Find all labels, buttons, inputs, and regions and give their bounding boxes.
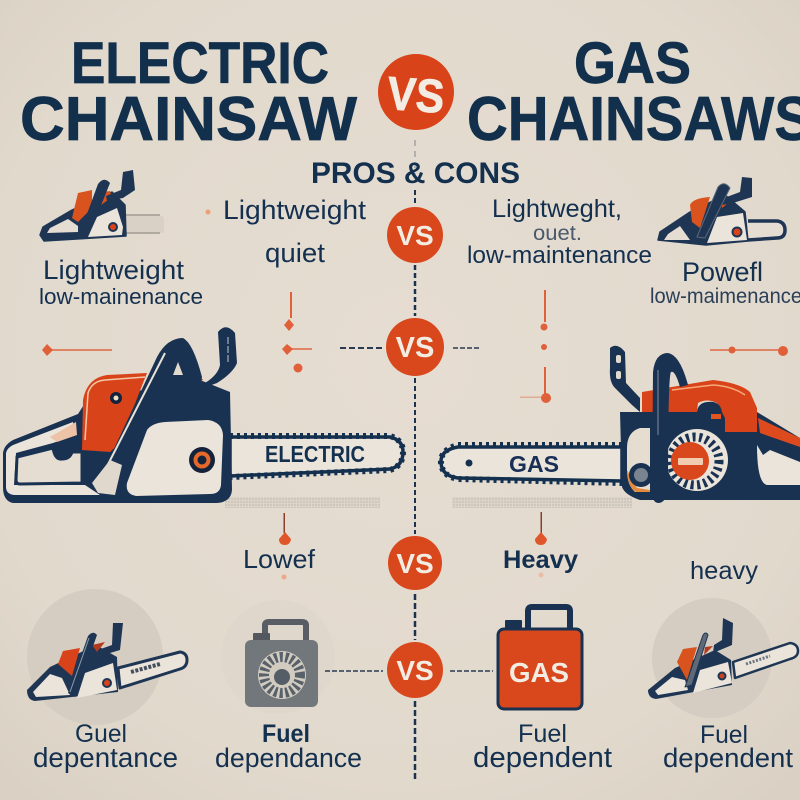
chain: [230, 436, 403, 477]
icon: vs badge row three: VS: [396, 548, 434, 579]
icon: vs badge row two: VS: [396, 332, 434, 364]
front a-handle: [97, 338, 202, 495]
text: powerful low-maintenance right: [650, 257, 800, 308]
shadow under gas saw: [452, 497, 632, 508]
text: lightweight low-maintenance left: Lightweight: [43, 255, 184, 285]
guide bar: [230, 437, 403, 476]
handle peach highlight: [50, 422, 77, 442]
rear handle: [6, 422, 100, 495]
callout: lower label right: [503, 512, 578, 578]
callout: lower label left: Lowef: [243, 544, 316, 574]
text: lightweight quiet: Lightweight: [223, 195, 367, 225]
title: vs badge: VS: [386, 66, 446, 123]
text: lightweight quiet: quiet: [265, 238, 325, 268]
cover eyelet: [110, 392, 122, 404]
icon: vs badge row one: [387, 207, 443, 263]
text: fuel dependance: Fuel: [262, 720, 310, 748]
callout: lower label right: Heavy: [503, 546, 578, 574]
illustration: large electric chainsaw: [3, 327, 403, 508]
icon: chainsaw in circle bottom right: [648, 598, 798, 718]
text: fuel dependent far right: dependent: [663, 743, 793, 773]
bar label: GAS: [509, 451, 559, 477]
icon: vs badge row two: [386, 318, 444, 376]
rear handle: [758, 418, 800, 447]
text: lightweight quiet low-maintenance: [467, 195, 652, 269]
icon: gray fuel can: [221, 600, 335, 714]
guide bar and chain: [441, 447, 622, 481]
icon: chainsaw in circle bottom left: [27, 589, 187, 725]
icon: vs badge row one: VS: [396, 220, 434, 251]
title: electric chainsaw: [20, 31, 357, 154]
text: lightweight low-maintenance left: low-mainenance: [39, 284, 203, 309]
illustration: large gas chainsaw: [441, 346, 800, 508]
text: guel dependance: depentance: [33, 742, 178, 773]
white front panel: [627, 428, 650, 492]
rear handle window: [16, 448, 82, 484]
front handle: [652, 353, 688, 503]
rear guard: [163, 327, 237, 402]
icon: vs badge row three: [388, 536, 442, 590]
text: fuel dependent center right: dependent: [473, 742, 612, 774]
dashed connector: bottom left: [325, 670, 383, 672]
bar label: ELECTRIC: [265, 441, 365, 467]
text: lightweight quiet: [223, 195, 367, 268]
text: fuel dependent center right: [473, 720, 612, 774]
text: lightweight low-maintenance left: [39, 255, 203, 309]
icon: red gas can: [498, 607, 582, 709]
title: gas chainsaws: GAS: [574, 31, 691, 96]
icon: vs badge row four: [387, 642, 443, 698]
white side cover: [127, 420, 223, 496]
drive dial: [189, 447, 215, 473]
title: electric chainsaw: ELECTRIC: [71, 31, 329, 96]
title: gas chainsaws: [467, 31, 800, 154]
text: fuel dependent center right: Fuel: [518, 720, 567, 748]
callout markers: left middle: [42, 210, 312, 372]
icon: small chainsaw top right: [658, 177, 785, 245]
text: lightweight quiet low-maintenance: ouet.: [533, 222, 582, 245]
text: fuel dependance: [215, 720, 362, 773]
center divider: [414, 140, 416, 782]
text: fuel dependance: dependance: [215, 743, 362, 773]
icon: small chainsaw top left: [40, 170, 164, 241]
text: guel dependance: [33, 720, 178, 773]
dashed connector: left middle: [340, 347, 382, 349]
callout markers: right middle: [520, 290, 788, 403]
title: vs badge: [378, 54, 454, 130]
title: electric chainsaw: CHAINSAW: [20, 85, 357, 154]
text: powerful low-maintenance right: Powefl: [682, 257, 763, 287]
saw body: [3, 380, 232, 503]
rear guard: [610, 346, 640, 412]
dashed connector: bottom right: [450, 670, 493, 672]
callout: lower label left: [243, 513, 316, 580]
cover latch: [697, 402, 722, 432]
orange motor cover: [82, 373, 147, 452]
text: fuel dependent far right: [663, 721, 793, 773]
shadow under electric saw: [225, 497, 380, 508]
starter recoil: [666, 429, 728, 491]
saw body: [620, 412, 800, 500]
text: lightweight quiet low-maintenance: Lightweght,: [492, 195, 622, 223]
icon: vs badge row four: VS: [396, 655, 434, 686]
orange engine cover: [642, 380, 757, 432]
text: guel dependance: Guel: [75, 720, 127, 748]
text: heavy far right: heavy: [690, 557, 759, 585]
dashed connector: right middle: [453, 347, 480, 349]
subtitle: PROS & CONS: [311, 157, 520, 190]
text: lightweight quiet low-maintenance: low-maintenance: [467, 242, 652, 269]
icon: red gas can: GAS: [509, 657, 569, 688]
text: fuel dependent far right: Fuel: [700, 721, 748, 749]
